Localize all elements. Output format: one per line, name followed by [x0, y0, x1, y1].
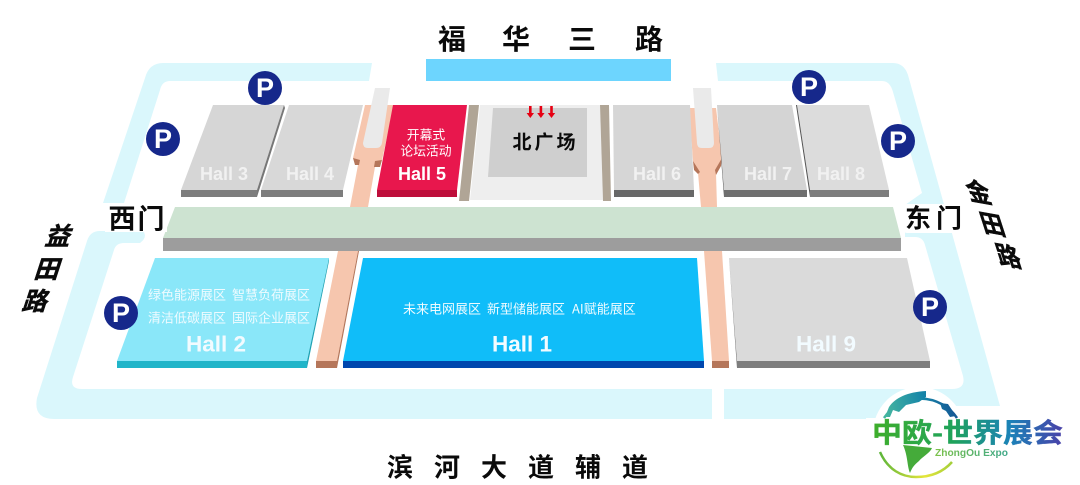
hall 5: 开幕式 — [407, 124, 445, 144]
road label: east: 田 — [974, 202, 1010, 244]
parking icon: top left — [248, 71, 282, 105]
road label: north — [438, 18, 663, 58]
road label: north: 福 — [438, 18, 466, 58]
hall 9 — [729, 258, 930, 368]
parking icon: left — [146, 122, 180, 156]
hall 4: Hall 4 — [286, 164, 334, 184]
road label: south: 河 — [434, 448, 460, 484]
road label: west: 益 — [42, 217, 78, 253]
top road bar — [426, 59, 671, 81]
hall 7 — [717, 105, 807, 197]
hall 2: Hall 2 — [186, 332, 246, 356]
logo: ZhongOu Expo — [866, 387, 1070, 481]
logo chinese name: 中欧-世界展会 — [872, 412, 1063, 450]
lower left walkway — [316, 251, 359, 368]
parking icon: right — [881, 124, 915, 158]
gate label: east: 东 — [905, 198, 931, 236]
parking icon: top right: P — [800, 72, 818, 102]
parking icon: hall 9: P — [921, 292, 939, 322]
upper right walkway — [689, 88, 722, 207]
logo ring — [880, 452, 952, 477]
hall 8: Hall 8 — [817, 164, 865, 184]
hall 2: 清洁低碳展区 — [148, 308, 226, 326]
hall 1 — [343, 258, 704, 368]
gate label: west: 门 — [138, 198, 164, 236]
north plaza: 场 — [556, 128, 576, 154]
hall 2: 绿色能源展区 — [148, 284, 226, 304]
logo english name: ZhongOu Expo — [935, 447, 1008, 459]
hall 8 — [796, 105, 889, 197]
hall 1: 未来电网展区 — [403, 298, 481, 318]
parking icon: top left: P — [256, 73, 274, 103]
road label: south: 道 — [622, 448, 648, 484]
road label: west: 路 — [19, 282, 56, 318]
north plaza — [459, 105, 611, 201]
logo globe continents — [885, 391, 956, 417]
parking icon: hall 2: P — [112, 298, 130, 328]
gate label: west: 西 — [108, 198, 136, 236]
hall 5: 论坛活动 — [400, 140, 452, 160]
hall 2: 智慧负荷展区 — [232, 284, 310, 304]
hall 2 — [117, 258, 329, 368]
hall 6: Hall 6 — [633, 164, 681, 184]
road label: south: 道 — [528, 448, 554, 484]
hall 3 — [181, 105, 285, 197]
hall 9: Hall 9 — [796, 332, 856, 356]
hall 5: Hall 5 — [398, 164, 446, 184]
central green corridor — [163, 207, 901, 251]
road label: south — [387, 448, 648, 484]
road label: south: 大 — [481, 448, 507, 484]
gate label: east: 门 — [936, 198, 962, 236]
upper left walkway — [350, 88, 394, 207]
hall 4 — [261, 105, 363, 197]
road label: north: 路 — [635, 18, 663, 58]
hall 1: AI赋能展区 — [572, 298, 636, 318]
hall 7: Hall 7 — [744, 164, 792, 184]
road label: north: 华 — [502, 18, 530, 58]
gate label: west — [105, 198, 167, 236]
road label: east: 路 — [990, 234, 1026, 276]
hall 3: Hall 3 — [200, 164, 248, 184]
lower right walkway — [704, 251, 729, 368]
logo globe outline — [884, 399, 957, 418]
road label: south: 滨 — [387, 448, 413, 484]
road label: west: 田 — [31, 250, 67, 286]
road label: west — [19, 217, 78, 318]
hall 1: Hall 1 — [492, 332, 552, 356]
road label: north: 三 — [568, 18, 596, 58]
parking icon: left: P — [154, 124, 172, 154]
road: upper right ring — [716, 63, 1000, 419]
parking icon: hall 2 — [104, 296, 138, 330]
hall 6 — [613, 105, 694, 197]
hall 5 — [377, 105, 467, 197]
road: lower left ring — [36, 231, 712, 419]
road label: east: 金 — [960, 170, 996, 212]
logo globe south america — [903, 445, 932, 473]
parking icon: hall 9 — [913, 290, 947, 324]
hall 2: 国际企业展区 — [232, 308, 310, 326]
north plaza: 北 — [512, 128, 532, 154]
road: upper left ring — [103, 63, 372, 203]
gate label: east — [903, 198, 965, 236]
road label: south: 辅 — [575, 448, 601, 484]
parking icon: top right — [792, 70, 826, 104]
entry arrows — [527, 106, 555, 118]
north plaza: 广 — [534, 128, 554, 154]
road label: east — [960, 170, 1026, 276]
parking icon: right: P — [889, 126, 907, 156]
hall 1: 新型储能展区 — [487, 298, 565, 318]
